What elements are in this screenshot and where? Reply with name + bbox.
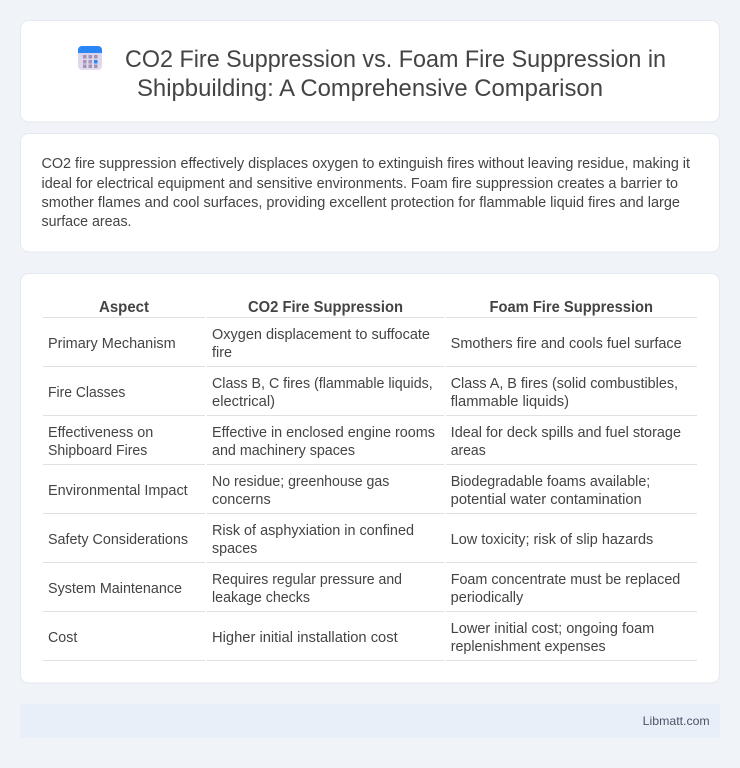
table row: safety considerations: Low toxicity; risk of slip hazards — [451, 532, 653, 548]
table row: primary mechanism: Smothers fire and cools fuel surface — [451, 336, 682, 352]
table row: environmental impact: potential water contamination — [451, 492, 642, 508]
text block: introduction paragraph: surface areas. — [42, 214, 132, 230]
text block: introduction paragraph: CO2 fire suppression effectively displaces oxygen to extinguish fires without leaving residue, making it — [42, 156, 690, 172]
table row: effectiveness on shipboard fires: Ideal for deck spills and fuel storage — [451, 425, 681, 441]
table header row: Aspect — [99, 299, 150, 316]
table row: fire classes: flammable liquids) — [451, 394, 569, 410]
table row: fire classes — [43, 376, 697, 416]
table row: system maintenance: leakage checks — [212, 590, 310, 606]
table row: environmental impact: Environmental Impact — [48, 483, 188, 499]
table row: effectiveness on shipboard fires: Effectiveness on — [48, 425, 153, 441]
table row: safety considerations: Safety Considerations — [48, 532, 188, 548]
panel: title header — [20, 20, 720, 122]
footer — [20, 704, 720, 738]
table row: fire classes: Class A, B fires (solid combustibles, — [451, 376, 678, 392]
table row: fire classes: Fire Classes — [48, 385, 125, 401]
table row: primary mechanism: fire — [212, 345, 232, 361]
icon: calendar — [78, 46, 102, 70]
table header row: Foam Fire Suppression — [490, 299, 653, 316]
table row: system maintenance: System Maintenance — [48, 581, 182, 597]
table row: safety considerations — [43, 523, 697, 562]
text block: introduction paragraph: ideal for electrical equipment and sensitive environments. Foam fire suppression creates a barrier to — [42, 176, 678, 192]
title: CO2 Fire Suppression vs. Foam Fire Suppression in — [125, 46, 666, 73]
table row: environmental impact: concerns — [212, 492, 271, 508]
table row: environmental impact — [43, 474, 697, 514]
table row: cost: Higher initial installation cost — [212, 630, 398, 646]
title: Shipbuilding: A Comprehensive Comparison — [137, 75, 603, 102]
table row: cost: replenishment expenses — [451, 639, 606, 655]
panel: introduction — [20, 134, 720, 252]
table row: effectiveness on shipboard fires: Shipboard Fires — [48, 443, 147, 459]
table row: safety considerations: Risk of asphyxiation in confined — [212, 523, 414, 539]
table row: effectiveness on shipboard fires: and machinery spaces — [212, 443, 355, 459]
table row: safety considerations: spaces — [212, 541, 257, 557]
table row: primary mechanism: Oxygen displacement to suffocate — [212, 327, 430, 343]
table row: effectiveness on shipboard fires: Effective in enclosed engine rooms — [212, 425, 435, 441]
table row: system maintenance: periodically — [451, 590, 524, 606]
table row: cost: Cost — [48, 630, 77, 646]
text block: introduction paragraph: smother flames and cool surfaces, providing excellent protection for flammable liquid fires and large — [42, 195, 680, 211]
table row: environmental impact: Biodegradable foams available; — [451, 474, 650, 490]
table row: system maintenance: Foam concentrate must be replaced — [451, 572, 680, 588]
table row: cost: Lower initial cost; ongoing foam — [451, 621, 654, 637]
table row: fire classes: Class B, C fires (flammable liquids, — [212, 376, 433, 392]
footer credit: Libmatt.com — [643, 714, 710, 728]
table row: environmental impact: No residue; greenhouse gas — [212, 474, 389, 490]
panel: comparison table — [20, 274, 720, 683]
table row: fire classes: electrical) — [212, 394, 275, 410]
text block: introduction paragraph — [42, 156, 690, 230]
table row: effectiveness on shipboard fires — [43, 425, 697, 464]
table row: system maintenance — [43, 572, 697, 612]
table row: effectiveness on shipboard fires: areas — [451, 443, 486, 459]
table row: system maintenance: Requires regular pressure and — [212, 572, 402, 588]
table header row: CO2 Fire Suppression — [248, 299, 403, 316]
table row: primary mechanism: Primary Mechanism — [48, 336, 176, 352]
table row: primary mechanism — [43, 327, 697, 366]
title — [125, 46, 666, 102]
table header row — [43, 299, 697, 318]
table row: cost — [43, 621, 697, 660]
